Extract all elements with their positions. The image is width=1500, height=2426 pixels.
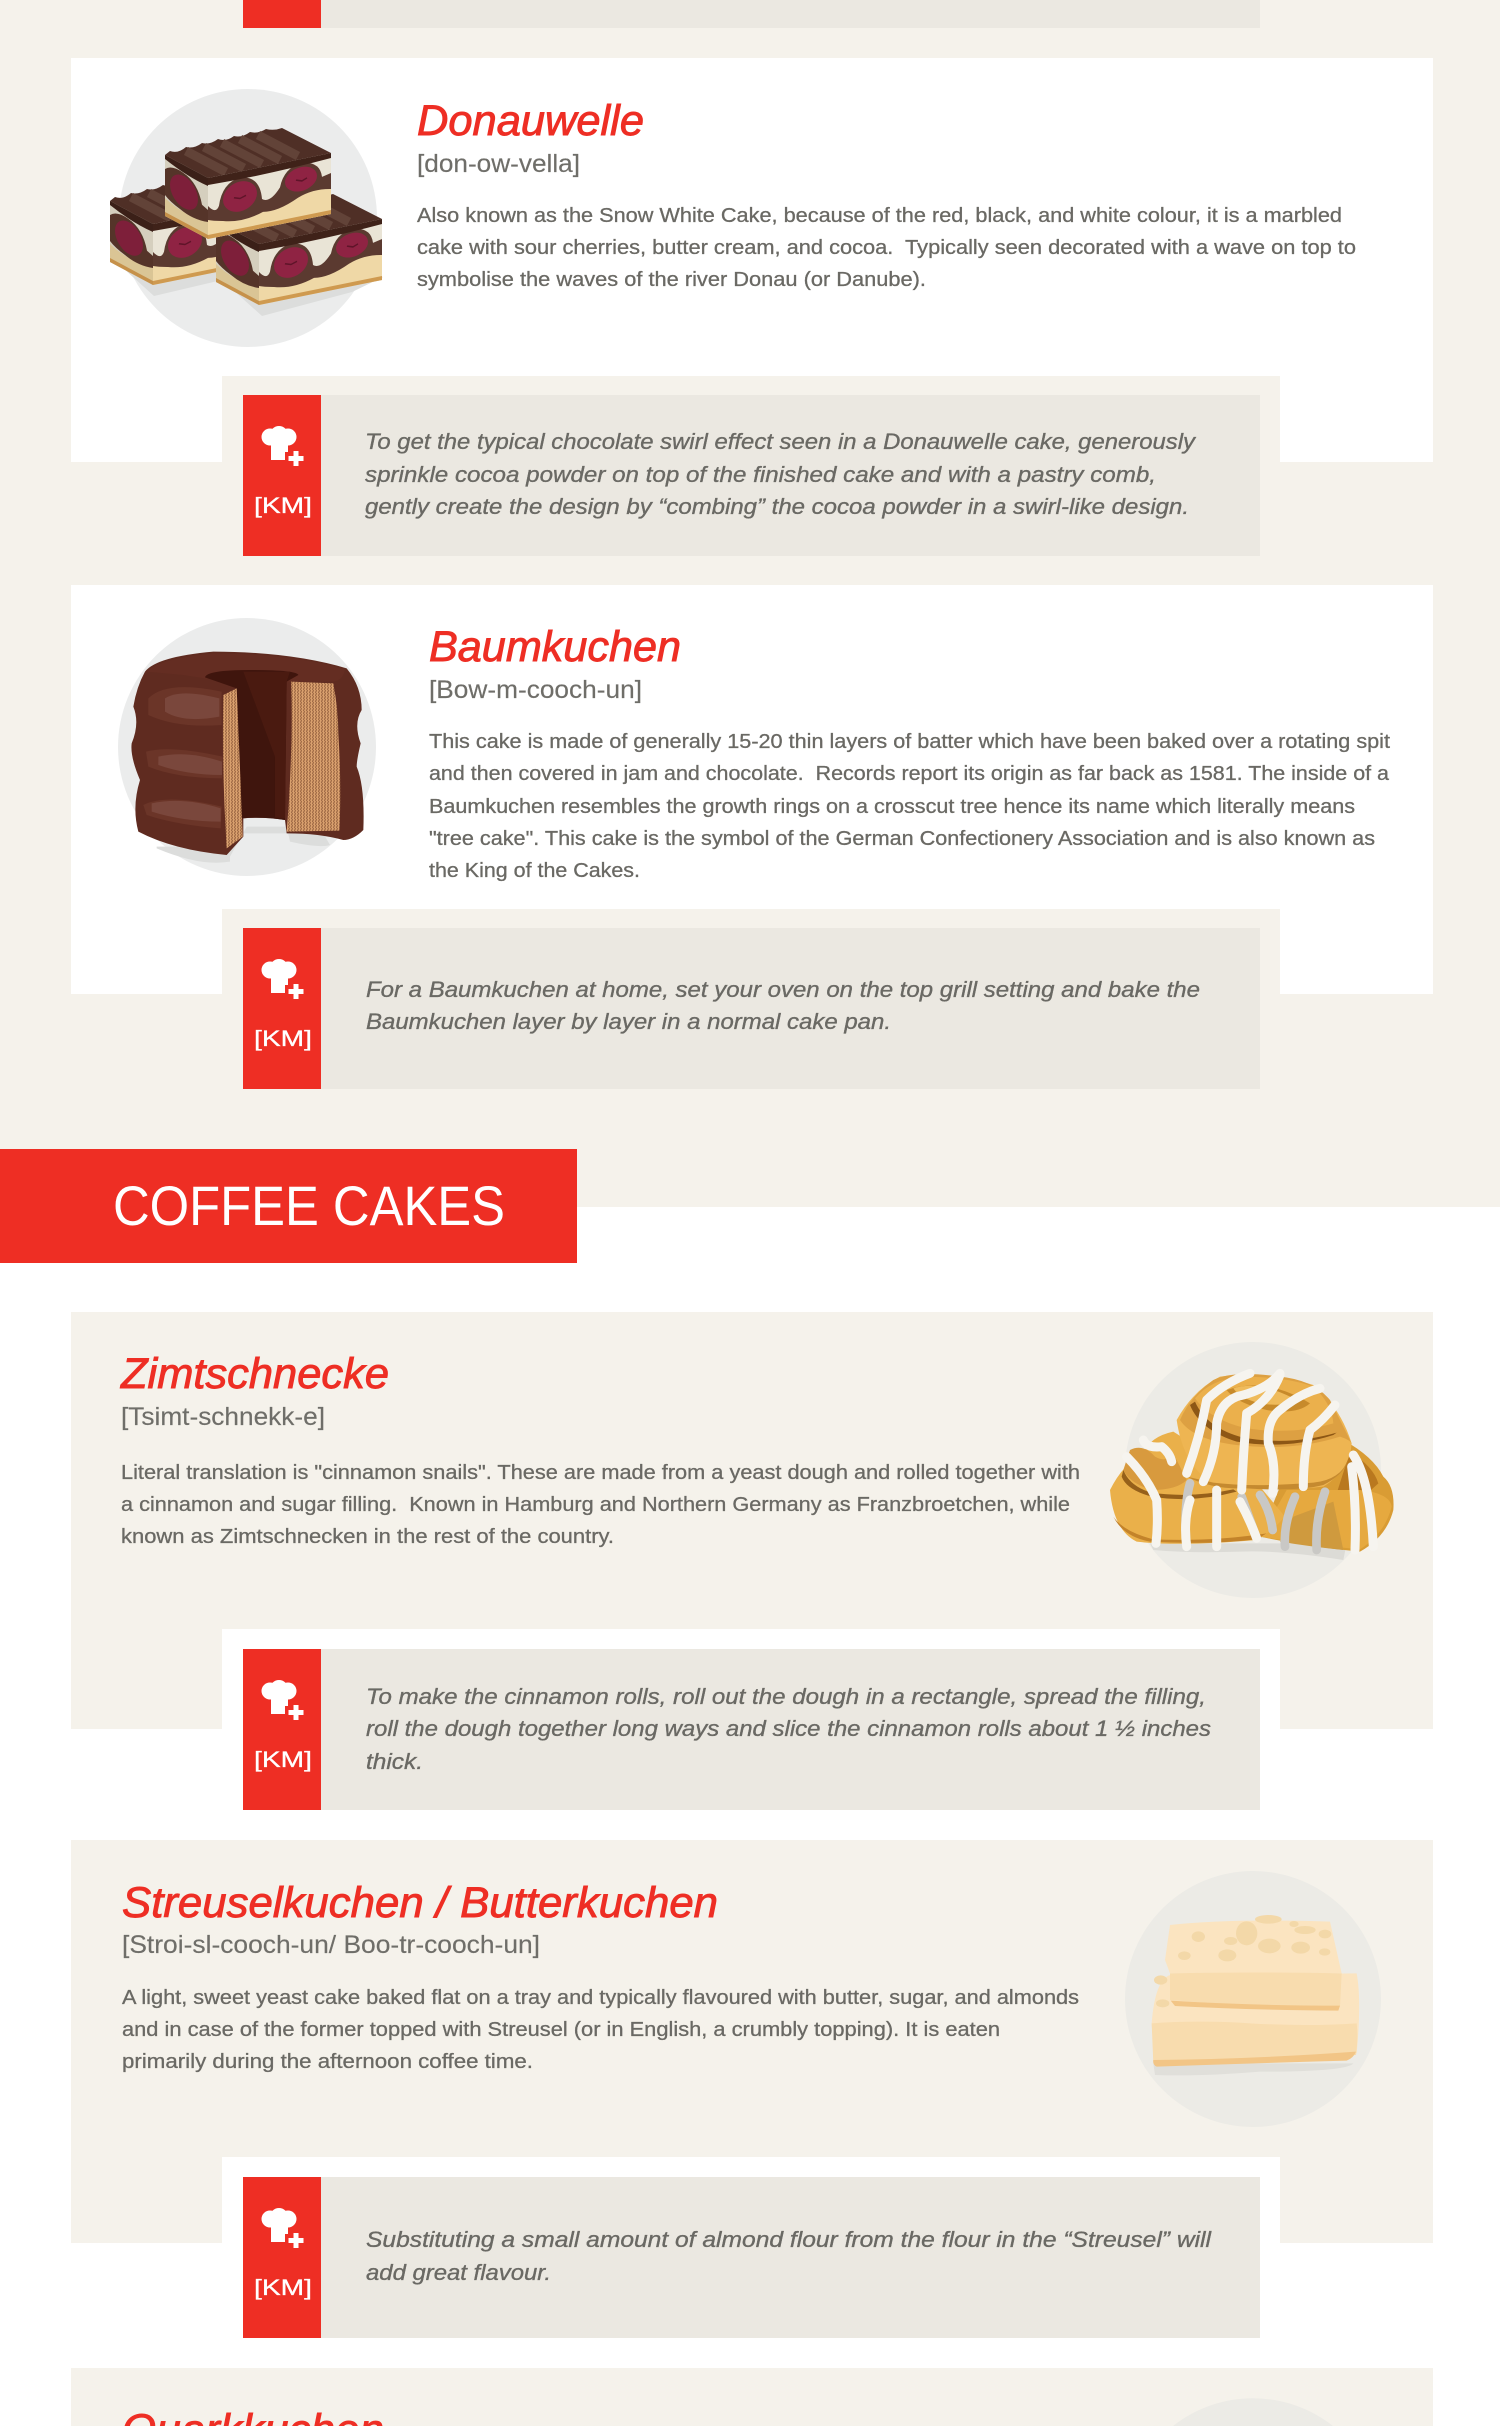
- callout: Donauwelle tip: [243, 395, 1260, 556]
- panel: Baumkuchen: [71, 585, 1433, 1089]
- tip text: sprinkle cocoa powder on top of the finished cake and with a pastry comb,: [365, 462, 1156, 487]
- panel: Zimtschnecke: [71, 1312, 1433, 1810]
- callout: Zimtschnecke tip: [243, 1649, 1260, 1810]
- description text: and in case of the former topped with Streusel (or in English, a crumbly topping). It is eaten: [122, 2019, 1000, 2041]
- pronunciation: [Stroi-sl-cooch-un/ Boo-tr-cooch-un]: [122, 1931, 540, 1959]
- section banner: Coffee Cakes: COFFEE CAKES: [113, 1174, 505, 1237]
- pronunciation: [Bow-m-cooch-un]: [429, 676, 642, 704]
- icon: Quarkkuchen plate: [1173, 2398, 1333, 2426]
- description text: "tree cake". This cake is the symbol of the German Confectionery Association and is also known as: [429, 828, 1375, 850]
- icon: Donauwelle cake illustration: [110, 89, 383, 347]
- icon: cinnamon rolls illustration: [1110, 1342, 1394, 1598]
- heading: Baumkuchen: Baumkuchen: [429, 623, 681, 671]
- tip text: [365, 429, 1197, 519]
- icon: chef hat: [262, 2208, 304, 2248]
- icon: Baumkuchen cake illustration: [118, 618, 376, 876]
- description text: symbolise the waves of the river Donau (or Danube).: [417, 269, 926, 291]
- tip text: [366, 977, 1200, 1034]
- icon: chef hat: [262, 1680, 304, 1720]
- description text: primarily during the afternoon coffee time.: [122, 2051, 533, 2073]
- panel: Donauwelle: [71, 58, 1433, 556]
- tip text: thick.: [366, 1749, 423, 1774]
- initials: [KM]: [254, 493, 312, 518]
- tip text: Substituting a small amount of almond flour from the flour in the “Streusel” will: [366, 2227, 1212, 2252]
- description text: [121, 1462, 1080, 1548]
- panel: Quarkkuchen: [71, 2368, 1433, 2426]
- pronunciation: [Tsimt-schnekk-e]: [121, 1403, 325, 1431]
- heading: Streuselkuchen / Butterkuchen: Streuselkuchen / Butterkuchen: [122, 1879, 718, 1927]
- description text: Literal translation is "cinnamon snails". These are made from a yeast dough and rolled together with: [121, 1462, 1080, 1484]
- tip text: gently create the design by “combing” the cocoa powder in a swirl-like design.: [365, 494, 1189, 519]
- description text: A light, sweet yeast cake baked flat on a tray and typically flavoured with butter, sugar, and almonds: [122, 1987, 1079, 2009]
- description text: known as Zimtschnecken in the rest of the country.: [121, 1526, 614, 1548]
- tip text: roll the dough together long ways and slice the cinnamon rolls about 1 ½ inches: [366, 1716, 1211, 1741]
- initials: [KM]: [254, 1026, 312, 1051]
- panel: Streuselkuchen: [71, 1840, 1433, 2338]
- section banner: Coffee Cakes: [0, 1149, 577, 1263]
- pronunciation: [don-ow-vella]: [417, 150, 580, 178]
- description text: [417, 205, 1356, 291]
- tip text: add great flavour.: [366, 2260, 551, 2285]
- callout: Streuselkuchen tip: [243, 2177, 1260, 2338]
- description text: cake with sour cherries, butter cream, and cocoa. Typically seen decorated with a wave on top to: [417, 237, 1356, 259]
- description text: This cake is made of generally 15-20 thin layers of batter which have been baked over a rotating spit: [429, 731, 1390, 753]
- description text: and then covered in jam and chocolate. Records report its origin as far back as 1581. The inside of a: [429, 763, 1390, 785]
- tip text: To get the typical chocolate swirl effect seen in a Donauwelle cake, generously: [365, 429, 1197, 454]
- icon: chef hat: [262, 426, 304, 466]
- description text: Also known as the Snow White Cake, because of the red, black, and white colour, it is a marbled: [417, 205, 1342, 227]
- tip fragment from previous cake: [243, 0, 1260, 28]
- heading: Donauwelle: Donauwelle: [417, 97, 644, 145]
- description text: Baumkuchen resembles the growth rings on a crosscut tree hence its name which literally means: [429, 796, 1355, 818]
- tip text: [366, 2227, 1212, 2285]
- initials: [KM]: [254, 1747, 312, 1772]
- icon: chef hat: [262, 959, 304, 999]
- tip text: Baumkuchen layer by layer in a normal cake pan.: [366, 1009, 891, 1034]
- description text: [429, 731, 1390, 882]
- initials: [KM]: [254, 2275, 312, 2300]
- tip text: [366, 1684, 1211, 1774]
- description text: [122, 1987, 1079, 2073]
- tip text: For a Baumkuchen at home, set your oven on the top grill setting and bake the: [366, 977, 1200, 1002]
- tip text: To make the cinnamon rolls, roll out the dough in a rectangle, spread the filling,: [366, 1684, 1206, 1709]
- description text: a cinnamon and sugar filling. Known in Hamburg and Northern Germany as Franzbroetchen, while: [121, 1494, 1070, 1516]
- heading: Zimtschnecke: Zimtschnecke: [120, 1350, 389, 1398]
- callout: Baumkuchen tip: [243, 928, 1260, 1089]
- description text: the King of the Cakes.: [429, 860, 640, 882]
- icon: Streuselkuchen illustration: [1125, 1871, 1381, 2127]
